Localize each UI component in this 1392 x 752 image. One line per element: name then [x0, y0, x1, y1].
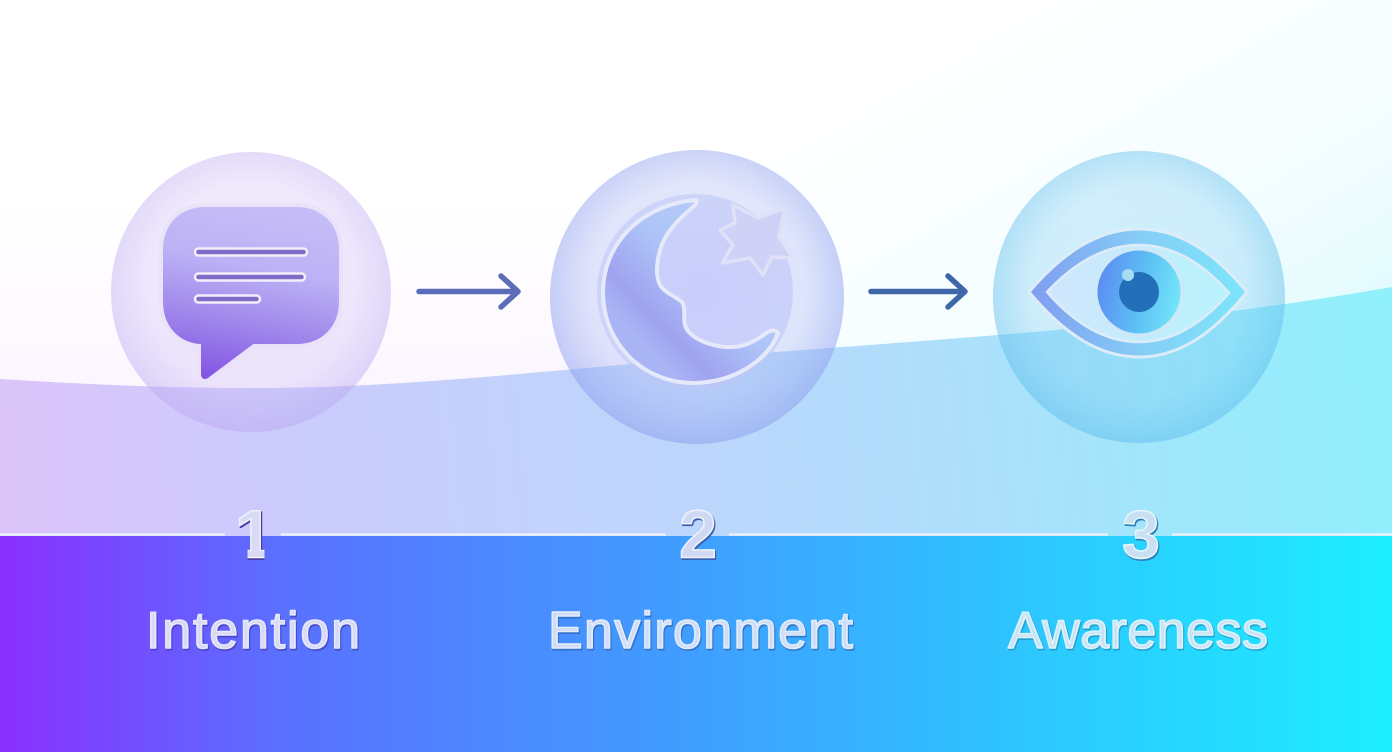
arrow 1	[419, 276, 518, 307]
wave panel	[0, 287, 1392, 537]
number 2: 2	[680, 498, 718, 574]
step 1 icon: speech bubble in circle	[111, 152, 391, 432]
crescent moon	[603, 200, 778, 383]
number 1	[238, 510, 264, 560]
number 3: 3	[1123, 498, 1161, 574]
eye white	[1047, 245, 1229, 342]
inner disk	[597, 194, 793, 390]
bottom gradient band	[0, 536, 1392, 752]
divider line segments	[0, 533, 1392, 536]
star	[720, 205, 793, 275]
iris	[1096, 249, 1182, 335]
bubble text lines	[195, 248, 307, 302]
speech bubble shape	[161, 205, 341, 381]
pupil highlight	[1122, 269, 1134, 281]
eye outline	[1029, 229, 1247, 357]
label: Environment: Environment	[549, 604, 855, 662]
label: Intention: Intention	[147, 604, 361, 662]
number 2: 2	[679, 496, 717, 572]
label: Awareness: Awareness	[1009, 604, 1269, 662]
number 1: 1	[236, 498, 274, 574]
step 3 icon: eye in circle	[993, 151, 1285, 443]
number 3: 3	[1122, 496, 1160, 572]
label: Environment: Environment	[548, 602, 854, 660]
label: Intention: Intention	[146, 602, 360, 660]
step 2 icon: moon and star in circle	[550, 150, 844, 444]
pupil	[1119, 272, 1159, 312]
arrow 2	[871, 276, 965, 307]
label: Awareness: Awareness	[1008, 602, 1268, 660]
number 1: 1	[235, 496, 273, 572]
